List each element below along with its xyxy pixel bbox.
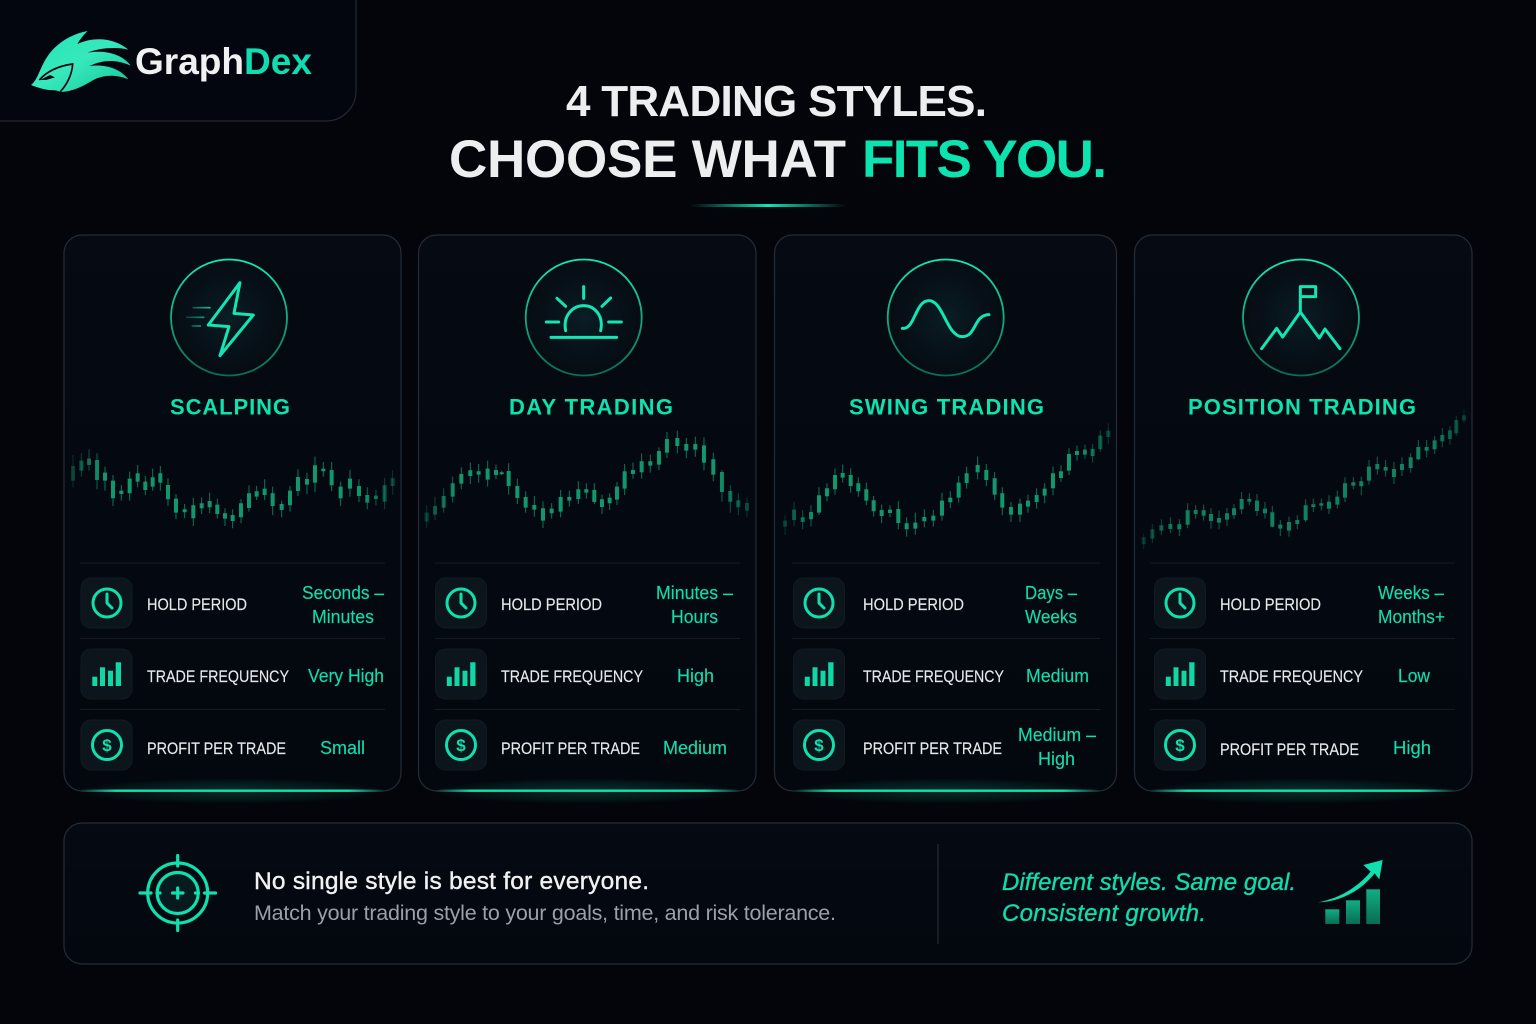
title [449,77,1107,189]
value: Small [320,738,365,758]
icon: dollar: $ [1175,736,1185,755]
icon: sunrise [526,260,642,376]
heading: SCALPING [170,394,290,420]
icon: dollar [436,720,486,770]
label: TRADE FREQUENCY [863,667,1004,686]
value: Low [1398,666,1431,686]
icon: clock [1154,578,1206,628]
icon: bars [794,649,844,699]
icon: dollar: $ [814,736,824,755]
bottom glow [792,778,1102,804]
panel: position trading [1134,235,1472,804]
value: High [677,666,714,686]
summary subtext: Match your trading style to your goals, time, and risk tolerance. [254,901,836,925]
icon: bars [1154,649,1206,699]
value: Hours [671,607,718,627]
candlestick chart [1144,409,1464,549]
icon: dollar: $ [456,736,466,755]
label: TRADE FREQUENCY [147,667,289,686]
value: High [1393,738,1431,758]
row: trade frequency [1154,649,1431,699]
row: hold period [794,578,1077,628]
value [1025,583,1077,627]
bottom glow [432,778,742,804]
candlestick chart [73,449,393,528]
icon: GraphDex logo wing [31,31,131,92]
label: TRADE FREQUENCY [1220,667,1363,686]
icon: lightning bolt [171,260,287,376]
value: Days – [1025,583,1077,603]
label: PROFIT PER TRADE [1220,740,1359,759]
value [1018,725,1096,769]
icon: target [140,856,216,930]
panel: day trading [418,235,756,804]
title underline [690,204,846,207]
candlestick chart [427,431,747,528]
icon: bars [81,649,132,699]
icon: clock [436,578,486,628]
label: PROFIT PER TRADE [501,739,640,758]
title line 2 left: CHOOSE WHAT [449,130,846,189]
heading: DAY TRADING [509,394,673,420]
label: PROFIT PER TRADE [863,739,1002,758]
row: trade frequency [794,649,1089,699]
row: profit per trade [436,720,727,770]
value: High [1038,749,1075,769]
title line 1: 4 TRADING STYLES. [566,77,987,126]
value: Weeks [1025,607,1077,627]
row: hold period [436,578,733,628]
icon: growth chart with arrow [1318,860,1383,924]
tagline: Consistent growth. [1002,900,1206,927]
value: Seconds – [302,583,384,603]
logo panel [0,0,356,121]
value: Weeks – [1378,583,1444,603]
value: Medium [1026,666,1089,686]
value: Minutes [312,607,374,627]
value: Minutes – [656,583,733,603]
title line 2 highlight: FITS YOU. [862,130,1107,189]
label: HOLD PERIOD [501,595,602,614]
value: Months+ [1378,607,1445,627]
row: profit per trade [1154,720,1431,770]
row: hold period [81,578,384,628]
value: Medium – [1018,725,1096,745]
heading: SWING TRADING [849,394,1044,420]
candlestick chart [785,423,1108,537]
row: profit per trade [81,720,365,770]
value [1378,583,1445,627]
value [656,583,733,627]
panel: summary [64,823,1472,964]
bottom glow [1147,778,1457,804]
value [302,583,384,627]
row: hold period [1154,578,1445,628]
panel: swing trading [774,235,1116,804]
icon: clock [794,578,844,628]
value: Very High [308,666,384,686]
summary headline: No single style is best for everyone. [254,868,649,895]
icon: clock [81,578,132,628]
row: profit per trade [794,720,1096,770]
icon: dollar [81,720,132,770]
icon: bars [436,649,486,699]
label: HOLD PERIOD [1220,595,1321,614]
value: Medium [663,738,727,758]
tagline [1002,869,1296,927]
row: trade frequency [436,649,714,699]
icon: dollar: $ [102,736,112,755]
panel: scalping [64,235,401,804]
icon: dollar [794,720,844,770]
icon: dollar [1154,720,1206,770]
label: HOLD PERIOD [147,595,247,614]
label: TRADE FREQUENCY [501,667,643,686]
icon: mountain flag [1243,260,1359,376]
logo wordmark: GraphDex [135,41,312,82]
heading: POSITION TRADING [1188,394,1416,420]
bottom glow [77,778,387,804]
tagline: Different styles. Same goal. [1002,869,1296,896]
label: PROFIT PER TRADE [147,739,286,758]
label: HOLD PERIOD [863,595,964,614]
icon: wave [888,260,1004,376]
row: trade frequency [81,649,384,699]
